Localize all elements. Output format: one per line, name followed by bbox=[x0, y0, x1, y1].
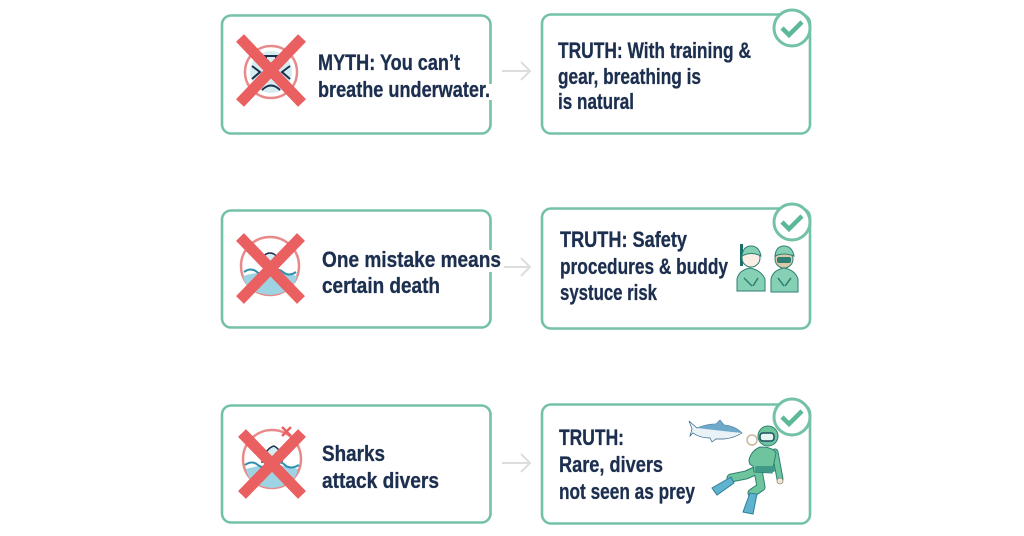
panel: truth 2 bbox=[542, 204, 810, 328]
icon: scuba diver bbox=[712, 426, 783, 514]
text: myth 3: Sharks bbox=[322, 441, 385, 466]
text: myth 1: breathe underwater. bbox=[318, 77, 490, 102]
text: truth 2: systuce risk bbox=[560, 280, 658, 305]
arrow 2 bbox=[504, 258, 530, 276]
text: truth 1 bbox=[558, 38, 751, 114]
icon: check badge bbox=[774, 10, 810, 46]
arrow 1 bbox=[502, 62, 530, 80]
icon: two divers bbox=[737, 244, 798, 292]
text: myth 3 bbox=[322, 441, 439, 493]
icon: check badge bbox=[774, 204, 810, 240]
text: myth 1 bbox=[318, 50, 490, 102]
panel: truth 3 bbox=[542, 399, 810, 524]
icon: crossed out shark fin in water bbox=[242, 427, 302, 495]
icon: check badge bbox=[774, 399, 810, 435]
text: myth 2: certain death bbox=[322, 273, 440, 298]
text: truth 1: TRUTH: With training & bbox=[558, 38, 751, 63]
text: truth 2: TRUTH: Safety bbox=[560, 227, 688, 252]
text: myth 2 bbox=[322, 247, 501, 298]
panel: myth 3 bbox=[222, 406, 490, 522]
text: myth 3: attack divers bbox=[322, 468, 439, 493]
icon: crossed out drowning person bbox=[240, 237, 301, 300]
panel: truth 1 bbox=[542, 10, 810, 134]
text: truth 3: not seen as prey bbox=[559, 479, 696, 504]
text: myth 2: One mistake means bbox=[322, 247, 501, 272]
text: truth 3 bbox=[559, 425, 696, 504]
icon: crossed out breathing face bbox=[240, 38, 302, 103]
panel: myth 2 bbox=[222, 210, 501, 328]
icon: shark bbox=[689, 420, 742, 442]
text: truth 2: procedures & buddy bbox=[560, 254, 729, 279]
arrow 3 bbox=[502, 454, 530, 472]
text: truth 3: Rare, divers bbox=[559, 452, 663, 477]
text: truth 3: TRUTH: bbox=[559, 425, 624, 450]
text: truth 2 bbox=[560, 227, 729, 305]
text: truth 1: is natural bbox=[558, 89, 634, 114]
text: truth 1: gear, breathing is bbox=[558, 64, 701, 89]
text: myth 1: MYTH: You can’t bbox=[318, 50, 461, 75]
panel: myth 1 bbox=[222, 16, 495, 134]
